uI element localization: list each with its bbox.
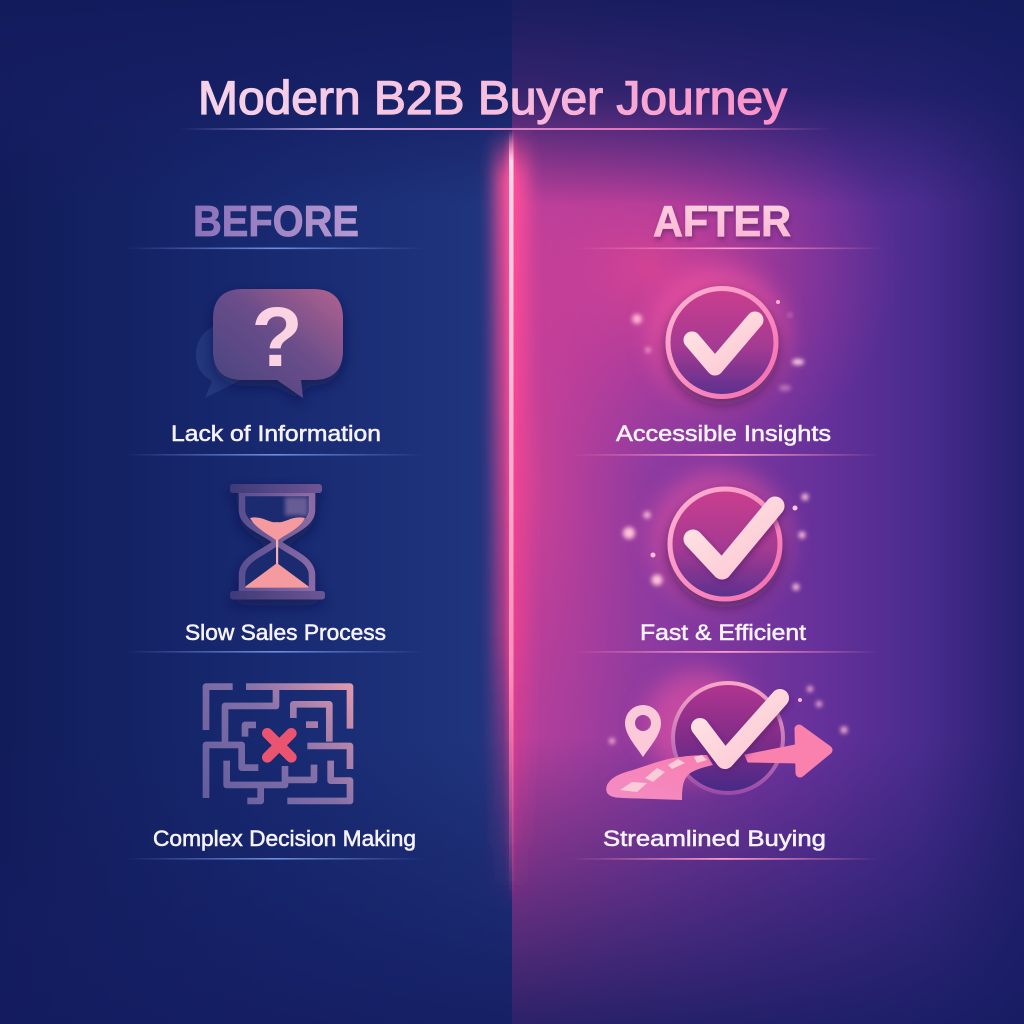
label: streamlined buying: Streamlined Buying xyxy=(603,826,826,851)
icon: question speech bubble: ? xyxy=(251,290,303,384)
icon: check badge with sparkles xyxy=(632,267,804,403)
icon: maze with red cross xyxy=(206,687,350,801)
heading: before: BEFORE xyxy=(193,197,359,246)
title: Modern B2B Buyer Journey xyxy=(198,71,788,124)
icon: location pin xyxy=(625,705,661,757)
icon: arrow xyxy=(745,729,828,773)
label: complex decision making: Complex Decision Making xyxy=(153,826,416,851)
icon: hourglass xyxy=(230,484,325,600)
central glowing divider xyxy=(494,130,528,910)
label: fast and efficient: Fast & Efficient xyxy=(640,620,806,645)
icon: large check badge with sparkles xyxy=(623,470,808,606)
panel: before column xyxy=(125,289,425,860)
label: lack of information: Lack of Information xyxy=(171,421,381,446)
icon: question speech bubble xyxy=(196,289,343,398)
icon: road xyxy=(606,755,713,800)
label: accessible insights: Accessible Insights xyxy=(616,421,831,446)
icon: road, pin, check and arrow xyxy=(606,670,848,800)
label: slow sales process: Slow Sales Process xyxy=(185,620,386,645)
panel: after column xyxy=(570,267,880,860)
title underline xyxy=(178,128,833,130)
heading: after: AFTER xyxy=(653,197,791,246)
